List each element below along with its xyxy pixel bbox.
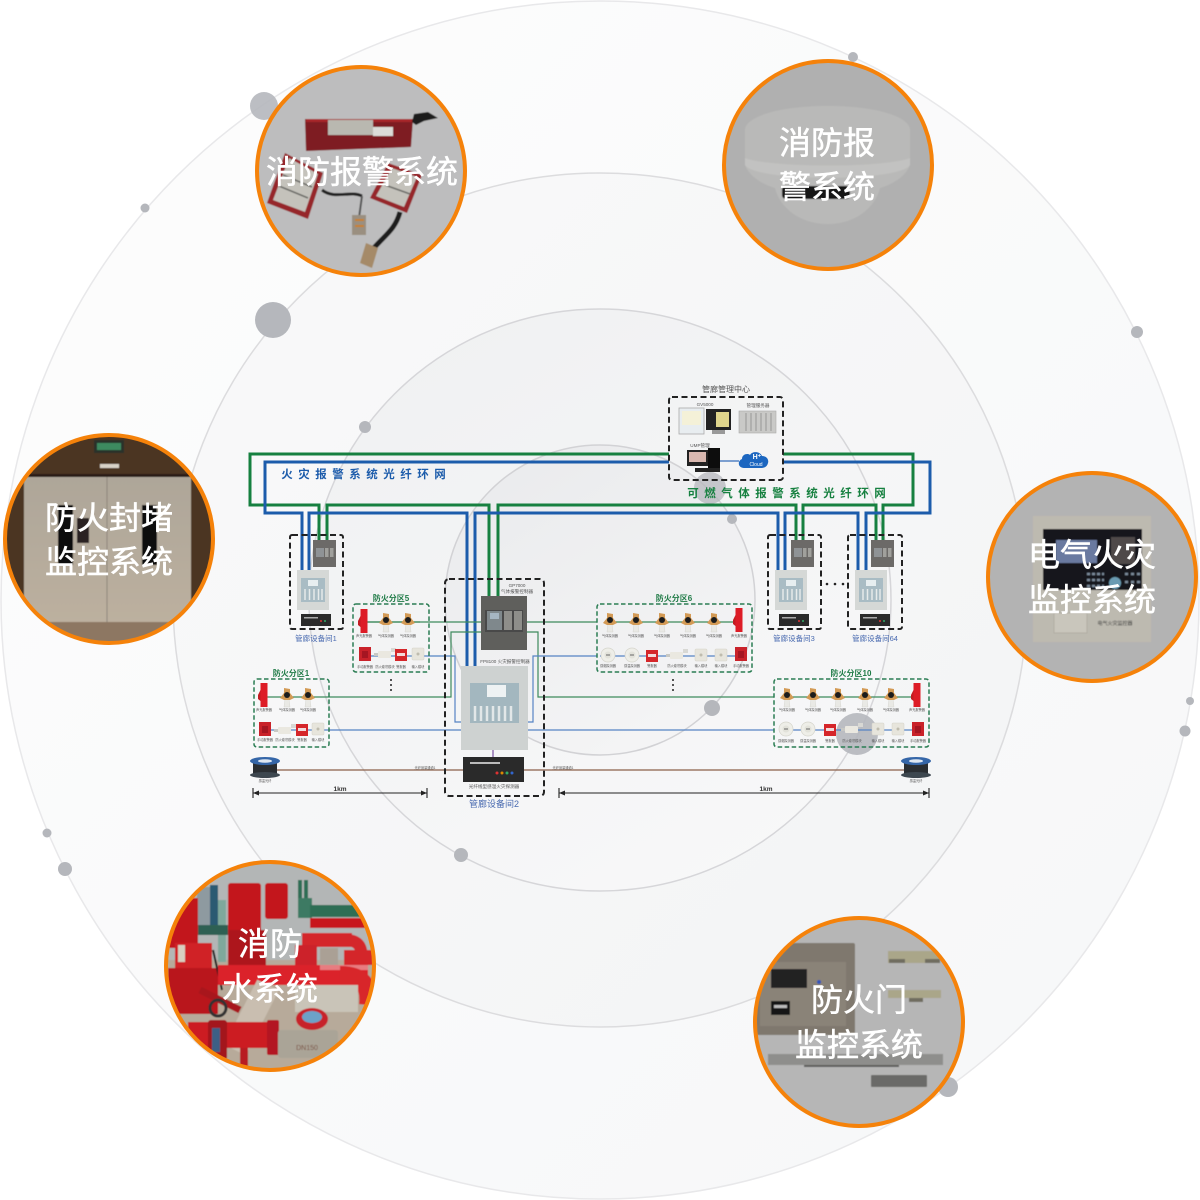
zone 10: 气体探测器 [779, 707, 796, 712]
zone 6: 气体探测器 [602, 633, 619, 638]
gas alarm ring title: 燃 [704, 486, 716, 500]
right 1km dimension: 1km [759, 786, 773, 793]
left fibre spool [250, 757, 280, 783]
label line 2: 警系统 [779, 169, 875, 205]
label line 2: 监控系统 [45, 544, 173, 580]
left fibre spool: 感温光纤 [259, 778, 272, 783]
zone 1: 手动报警器 [257, 737, 274, 742]
label: 电气火灾 [1028, 537, 1156, 573]
zone 10: 气体探测器 [830, 707, 847, 712]
management centre: 管廊管理中心 [702, 384, 750, 394]
zone 1: 气体探测器 [300, 707, 317, 712]
zone 10: 气体探测器 [857, 707, 874, 712]
field wiring [265, 622, 918, 770]
zone 1: 防火卷帘模块 [275, 737, 295, 742]
right 1km dimension [559, 786, 929, 798]
fire alarm ring title: 光 [383, 467, 395, 481]
ellipsis between rooms [826, 583, 844, 585]
fire alarm ring title: 统 [366, 467, 378, 481]
fibre channel labels [415, 765, 574, 770]
zone 5: 手动报警器 [357, 664, 374, 669]
gas alarm ring title: 统 [806, 486, 818, 500]
zone 1: 防火分区1 [273, 668, 310, 678]
system diagram [250, 384, 931, 809]
zone 5: 输入模块 [412, 664, 425, 669]
bubble: fire alarm devices [250, 60, 470, 280]
label: 防火封堵 [45, 500, 173, 536]
zone 6: 防火分区6 [656, 593, 693, 603]
zone 10: 防火分区10 [831, 668, 872, 678]
zone 6 [597, 593, 752, 672]
fire alarm ring title: 警 [332, 467, 344, 481]
fire alarm ring title: 环 [417, 468, 429, 481]
room 1: 管廊设备间1 [295, 633, 337, 643]
zone 10 [774, 668, 929, 747]
management centre: H⁺ [753, 454, 762, 461]
room 2: GP7000 [509, 583, 526, 588]
fibre ring: blue [265, 462, 930, 666]
gas alarm ring title: 环 [857, 487, 869, 500]
fire alarm ring title: 火 [281, 468, 293, 481]
room 2: FP8100 火灾报警控制器 [480, 658, 530, 665]
zone 10: 气体探测器 [883, 707, 900, 712]
right fibre spool [901, 757, 931, 783]
zone 10: 警报器 [825, 738, 836, 743]
zone 1: 气体探测器 [279, 707, 296, 712]
zone 5: 气体探测器 [400, 633, 417, 638]
zone 5: 防火卷帘模块 [375, 664, 395, 669]
room 2 [445, 579, 544, 809]
bubble: fire water pumps: DN150 [296, 1045, 318, 1052]
zone 6: 气体探测器 [680, 633, 697, 638]
zone 1: 声光报警器 [256, 707, 273, 712]
gas alarm ring title: 网 [874, 487, 886, 500]
left 1km dimension [253, 786, 427, 798]
management centre: GV5000 [697, 402, 714, 407]
management centre: UMP管理 [690, 442, 710, 449]
zone 1: 警报器 [297, 737, 308, 742]
bubble: smoke detector [722, 59, 934, 271]
bubble: electrical fire panel: 电气火灾监控器 [1097, 620, 1133, 627]
gas alarm ring title: 纤 [840, 486, 852, 500]
ellipsis between zones [390, 679, 674, 691]
room 64 [848, 535, 902, 643]
bubble: fire door monitoring [745, 915, 970, 1130]
fibre channel labels: 光纤测量通道1 [553, 765, 574, 770]
zone 6: 声光报警器 [731, 633, 748, 638]
zone 5: 防火分区5 [373, 593, 410, 603]
bubble: electrical fire panel [985, 470, 1200, 685]
gas alarm ring title: 警 [772, 486, 784, 500]
gas alarm ring title: 可 [687, 487, 699, 500]
fire alarm ring title: 灾 [298, 467, 310, 481]
label: 消防 [238, 926, 302, 962]
gas alarm ring title: 光 [823, 486, 835, 500]
zone 5 [353, 593, 429, 672]
zone 10: 感温探测器 [800, 738, 817, 743]
zone 1 [254, 668, 329, 747]
label: 消防报 [779, 125, 875, 161]
zone 6: 输入模块 [715, 663, 728, 668]
fibre ring: green [250, 454, 913, 597]
zone 10: 声光报警器 [909, 707, 926, 712]
zone 10: 输入模块 [892, 738, 905, 743]
fibre channel labels: 光纤测量通道1 [415, 765, 436, 770]
zone 10: 感烟探测器 [778, 738, 795, 743]
fire alarm ring title: 系 [349, 467, 361, 481]
left 1km dimension: 1km [333, 786, 347, 793]
zone 10: 手动报警器 [910, 738, 927, 743]
fire alarm ring title [281, 467, 446, 481]
zone 5: 声光报警器 [356, 633, 373, 638]
zone 6: 气体探测器 [628, 633, 645, 638]
fire alarm ring title: 报 [315, 467, 327, 481]
room 3 [768, 535, 821, 643]
room 1 [290, 535, 343, 643]
room 2: 光纤线型感温火灾探测器 [469, 783, 520, 790]
zone 6: 防火卷帘模块 [667, 663, 687, 668]
zone 6: 警报器 [647, 663, 658, 668]
zone 5: 气体探测器 [378, 633, 395, 638]
room 2: 气体报警控制器 [501, 588, 533, 595]
room 64: 管廊设备间64 [852, 633, 898, 643]
room 2: 管廊设备间2 [469, 798, 519, 809]
zone 10: 防火卷帘模块 [842, 738, 862, 743]
room 3: 管廊设备间3 [773, 633, 815, 643]
bubble: fire water pumps [160, 860, 380, 1075]
management centre: Cloud [749, 462, 763, 468]
zone 6: 感温探测器 [624, 663, 641, 668]
zone 5: 警报器 [396, 664, 407, 669]
fire alarm ring title: 纤 [400, 467, 412, 481]
label line 2: 水系统 [222, 971, 318, 1007]
zone 6: 手动报警器 [733, 663, 750, 668]
label line 2: 监控系统 [1028, 582, 1156, 618]
fire alarm ring title: 网 [434, 468, 446, 481]
bubble: fire door [0, 430, 220, 652]
gas alarm ring title: 气 [721, 486, 733, 500]
gas alarm ring title: 报 [755, 486, 767, 500]
label: 消防报警系统 [266, 154, 458, 190]
label line 2: 监控系统 [795, 1027, 923, 1063]
zone 6: 气体探测器 [654, 633, 671, 638]
label: 防火门 [811, 982, 907, 1018]
management centre [669, 384, 783, 480]
gas alarm ring title: 系 [789, 486, 801, 500]
gas alarm ring title: 体 [738, 486, 750, 500]
zone 6: 输入模块 [695, 663, 708, 668]
gas alarm ring title [687, 486, 886, 500]
right fibre spool: 感温光纤 [910, 778, 923, 783]
zone 10: 气体探测器 [805, 707, 822, 712]
zone 1: 输入模块 [312, 737, 325, 742]
zone 6: 气体探测器 [706, 633, 723, 638]
zone 10: 输入模块 [872, 738, 885, 743]
zone 6: 感烟探测器 [600, 663, 617, 668]
management centre: 管理服务器 [747, 402, 770, 409]
